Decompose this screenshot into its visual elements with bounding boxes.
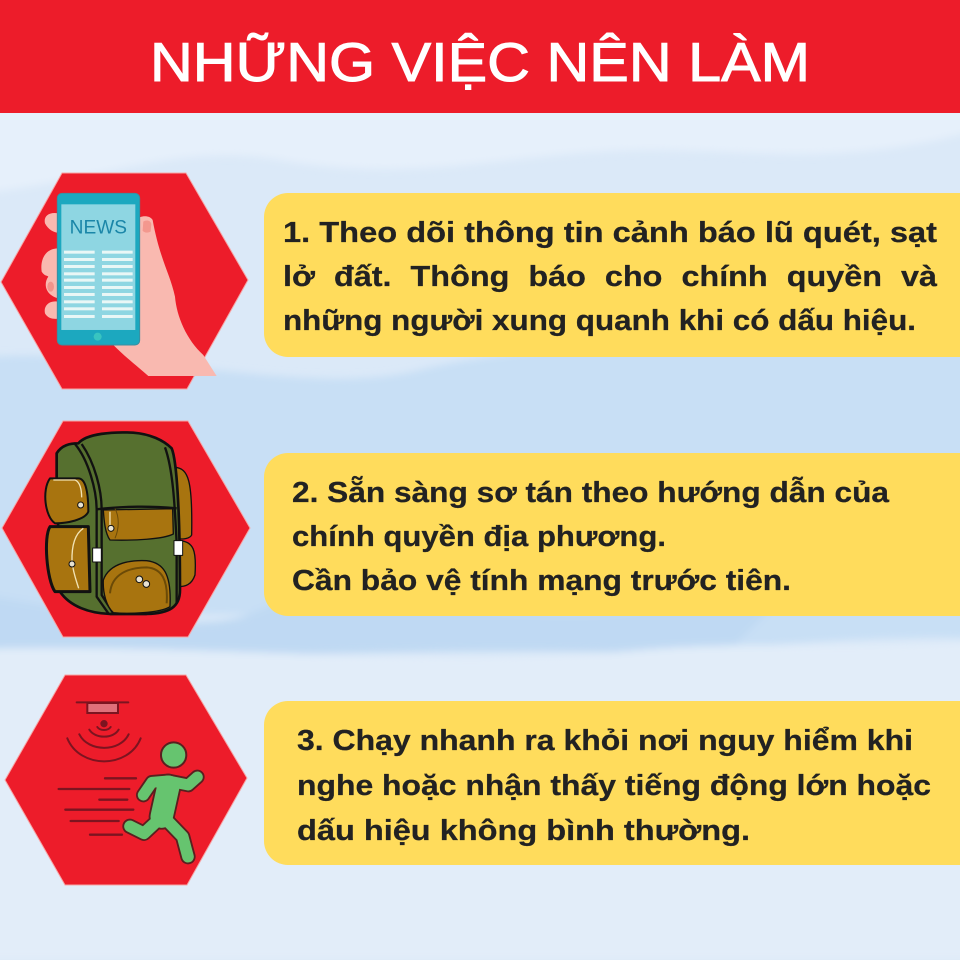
panel: step 2 text box: 2. Sẵn sàng sơ tán theo hướng dẫn của bbox=[292, 475, 890, 509]
icon: alarm sensor bbox=[59, 702, 141, 835]
panel: step 3 text box: dấu hiệu không bình thường. bbox=[297, 815, 750, 847]
title: NHỮNG VIỆC NÊN LÀM bbox=[150, 31, 810, 93]
screen label: news: NEWS bbox=[70, 217, 127, 238]
panel: step 1 text box: 1. Theo dõi thông tin cảnh báo lũ quét, sạt bbox=[283, 217, 937, 249]
panel: step 1 text box: lở đất. Thông báo cho chính quyền và bbox=[283, 261, 938, 293]
panel: step 2 icon, backpack bbox=[2, 421, 250, 637]
panel: step 1 text box bbox=[264, 193, 960, 357]
panel: step 2 text box: chính quyền địa phương. bbox=[292, 521, 666, 553]
panel: step 3 text box bbox=[264, 701, 960, 865]
icon: runner bbox=[130, 742, 197, 857]
panel: step 2 text box bbox=[264, 453, 960, 616]
header banner bbox=[0, 0, 960, 113]
panel: step 3 text box: 3. Chạy nhanh ra khỏi nơi nguy hiểm khi bbox=[297, 725, 913, 757]
panel: step 3 text box: nghe hoặc nhận thấy tiếng động lớn hoặc bbox=[297, 770, 931, 802]
panel: step 2 text box: Cần bảo vệ tính mạng trước tiên. bbox=[292, 565, 791, 597]
panel: step 1 text box: những người xung quanh khi có dấu hiệu. bbox=[283, 305, 916, 337]
panel: step 1 icon, phone with news bbox=[1, 173, 248, 389]
panel: step 3 icon, running person bbox=[5, 675, 247, 885]
